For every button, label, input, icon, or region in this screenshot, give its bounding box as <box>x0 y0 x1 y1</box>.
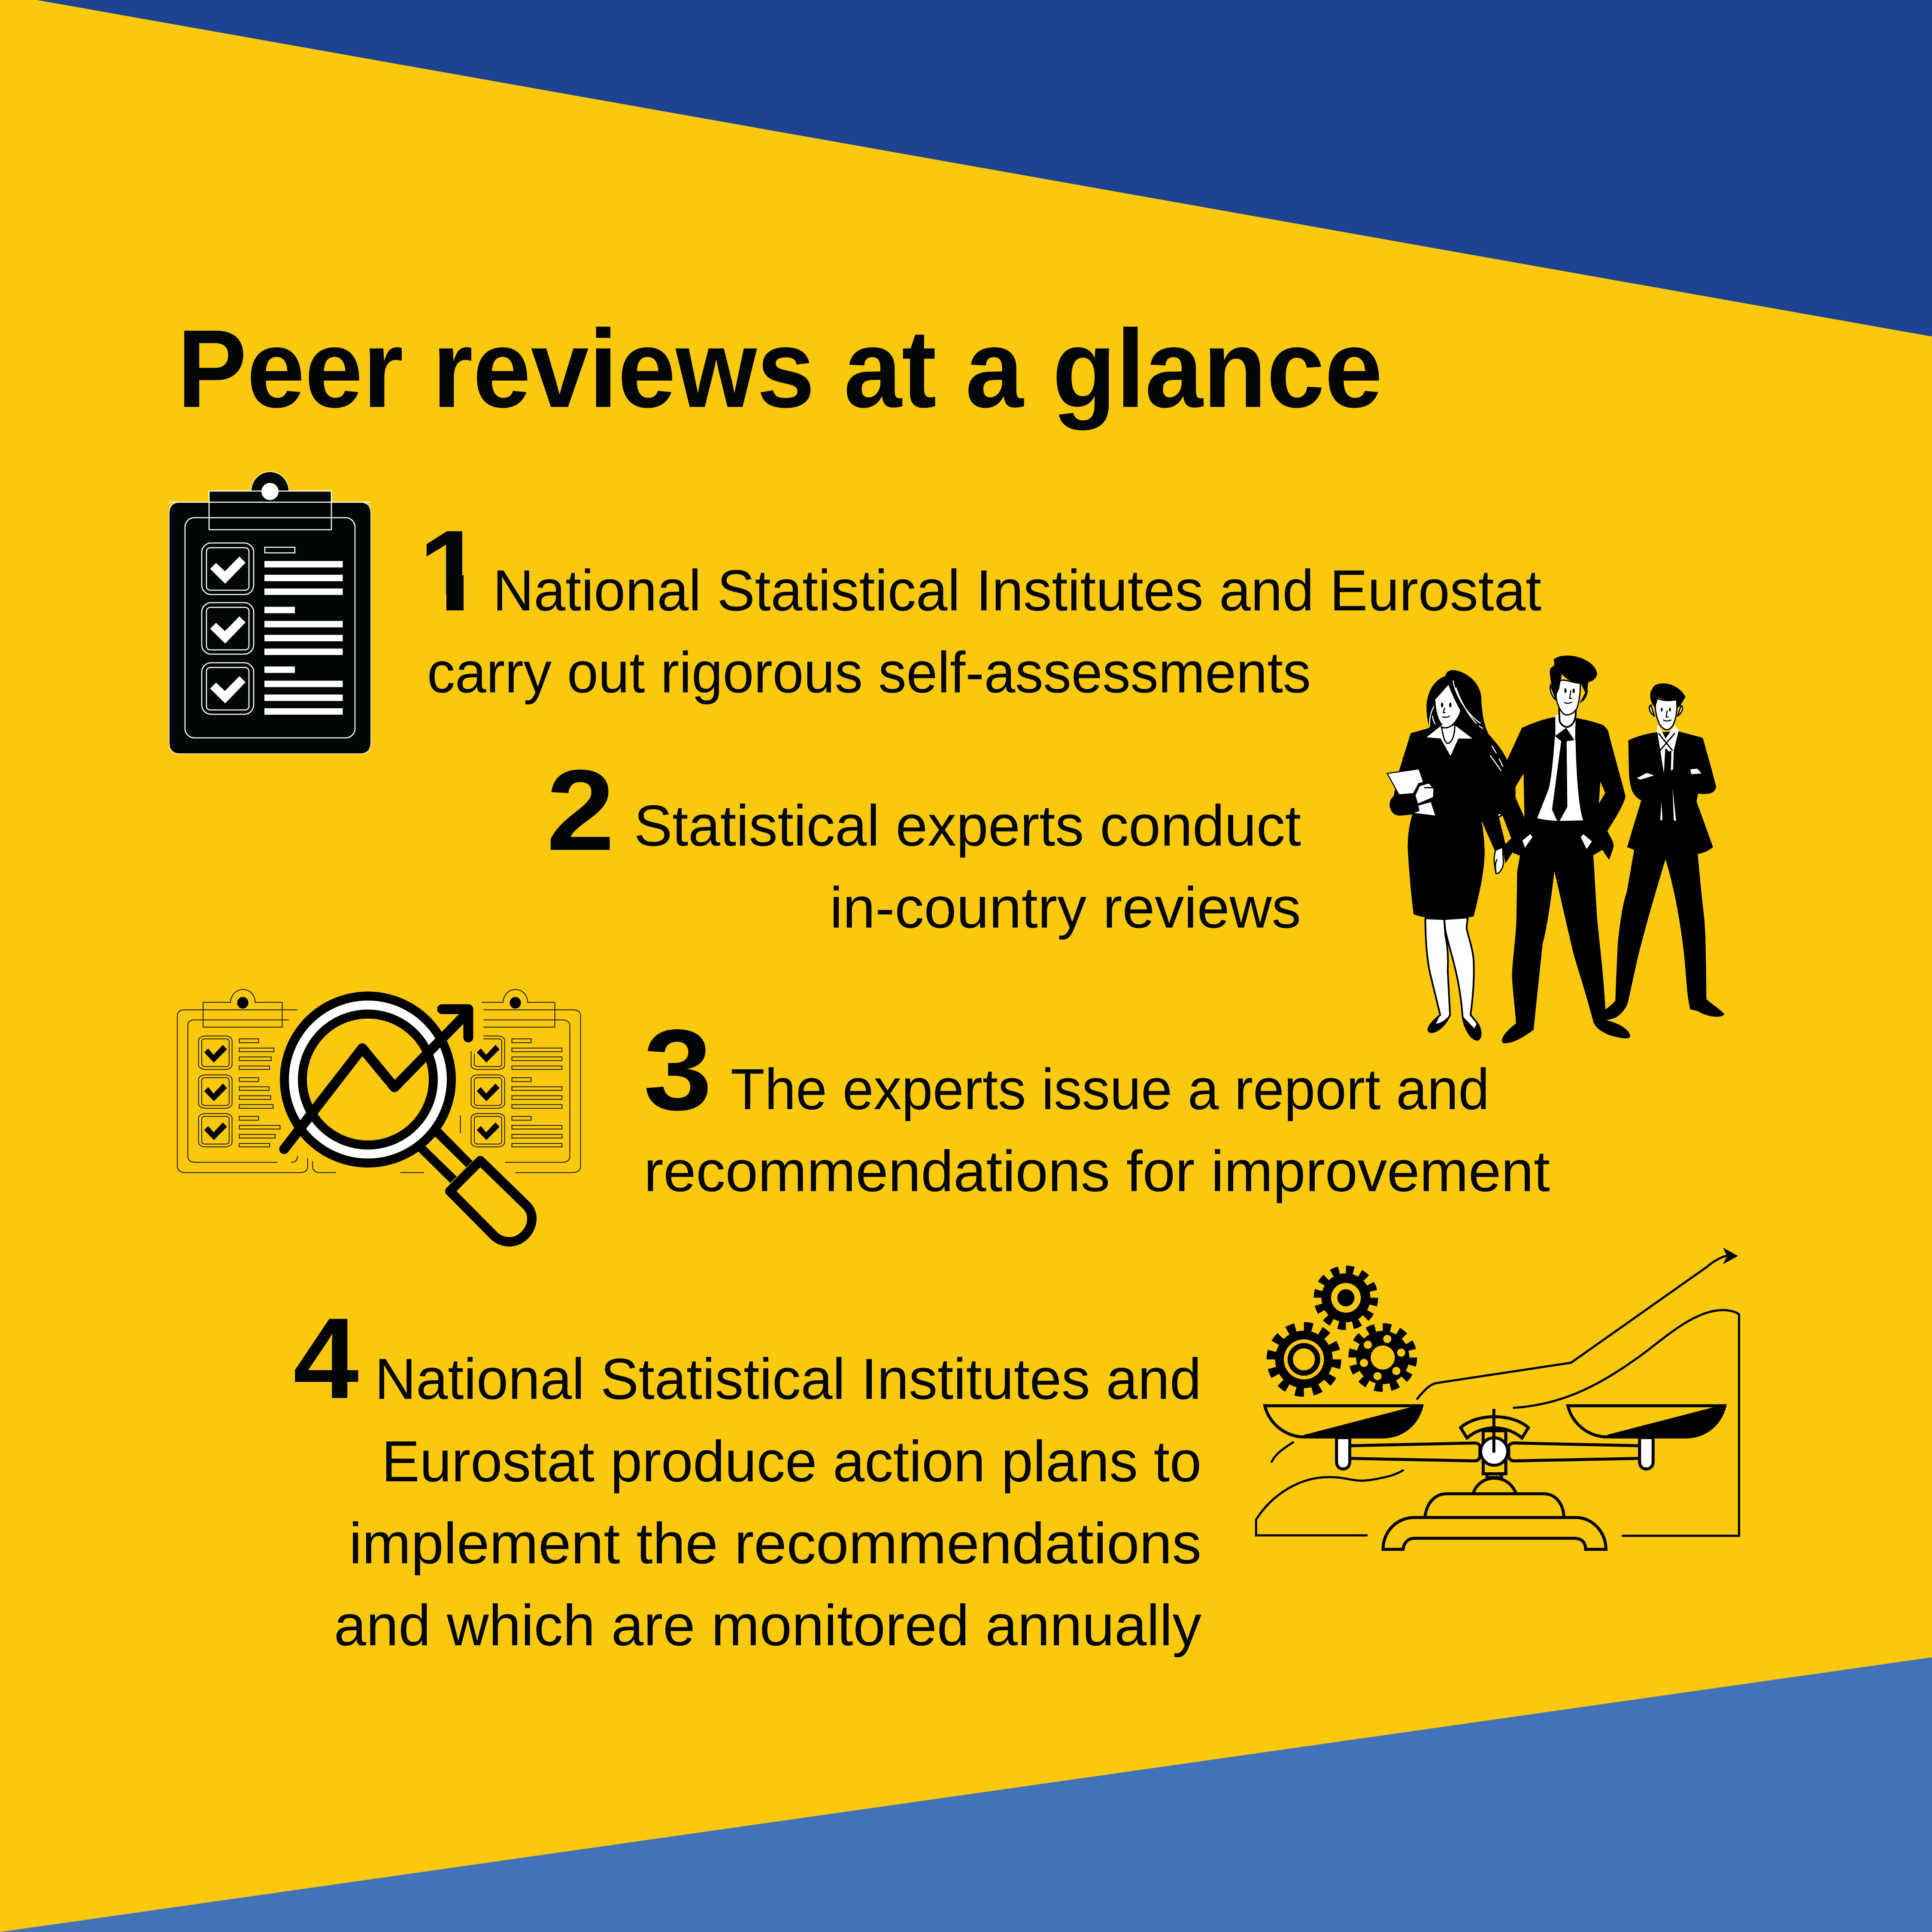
step 2 text: in-country reviews <box>830 875 1301 940</box>
step 2 text: Statistical experts conduct <box>634 793 1301 858</box>
right pan <box>1568 1406 1725 1437</box>
step 4 text: and which are monitored annually <box>334 1593 1201 1658</box>
step 4 text: National Statistical Institutes and <box>375 1347 1201 1411</box>
third man silhouette <box>1605 731 1724 1020</box>
background hills outline <box>1256 1310 1739 1536</box>
top dark blue triangle <box>37 0 1932 337</box>
step 4 text <box>293 1294 1201 1658</box>
scale beam <box>1351 1443 1638 1461</box>
step 1 text: National Statistical Institutes and Eurostat <box>493 558 1541 623</box>
scale posts <box>1337 1438 1653 1469</box>
rising chart arrow <box>284 1009 468 1149</box>
step 1 text: carry out rigorous self-assessments <box>427 640 1311 705</box>
icon: balance scale with gears and growth line <box>1256 1248 1739 1549</box>
step 3 text: 3 <box>643 1005 712 1134</box>
step 3 text: recommendations for improvement <box>644 1139 1550 1204</box>
step 3 text <box>643 1005 1550 1204</box>
magnifier handle <box>450 1161 532 1242</box>
magnifier lens rings <box>280 992 456 1168</box>
step 2 text <box>546 746 1301 940</box>
bottom light blue triangle <box>0 1657 1932 1932</box>
step 4 text: implement the recommendations <box>349 1511 1201 1576</box>
growth arrow line <box>1416 1256 1728 1399</box>
icon: clipboard checklist <box>169 472 371 754</box>
icon: magnifier over clipboards <box>177 989 580 1242</box>
arrow head <box>1723 1248 1738 1264</box>
step 3 text: The experts issue a report and <box>731 1057 1489 1122</box>
step 1 text: 1 <box>419 506 484 635</box>
gaps between man's arms and torso <box>1516 773 1605 818</box>
faint clipboards behind magnifier <box>177 989 580 1173</box>
title: Peer reviews at a glance <box>177 306 1383 431</box>
magnifier neck <box>418 1129 473 1183</box>
man's shirt, collar, cuffs and head <box>1521 655 1597 849</box>
scale centre tower, dial and base <box>1383 1409 1606 1549</box>
gears <box>1271 1270 1413 1392</box>
left pan <box>1265 1406 1422 1437</box>
scale and lines <box>1256 1248 1739 1549</box>
step 4 text: Eurostat produce action plans to <box>382 1429 1201 1494</box>
step 2 text: 2 <box>546 746 615 874</box>
gap between woman's arm and man <box>1499 816 1511 844</box>
step 4 text: 4 <box>293 1294 360 1422</box>
woman's head, collar, paper and legs <box>1387 680 1504 1040</box>
illustration: three business people <box>1387 655 1724 1043</box>
third man details <box>1637 683 1701 821</box>
step 1 text <box>419 506 1541 705</box>
woman body and hair <box>1389 670 1630 1043</box>
